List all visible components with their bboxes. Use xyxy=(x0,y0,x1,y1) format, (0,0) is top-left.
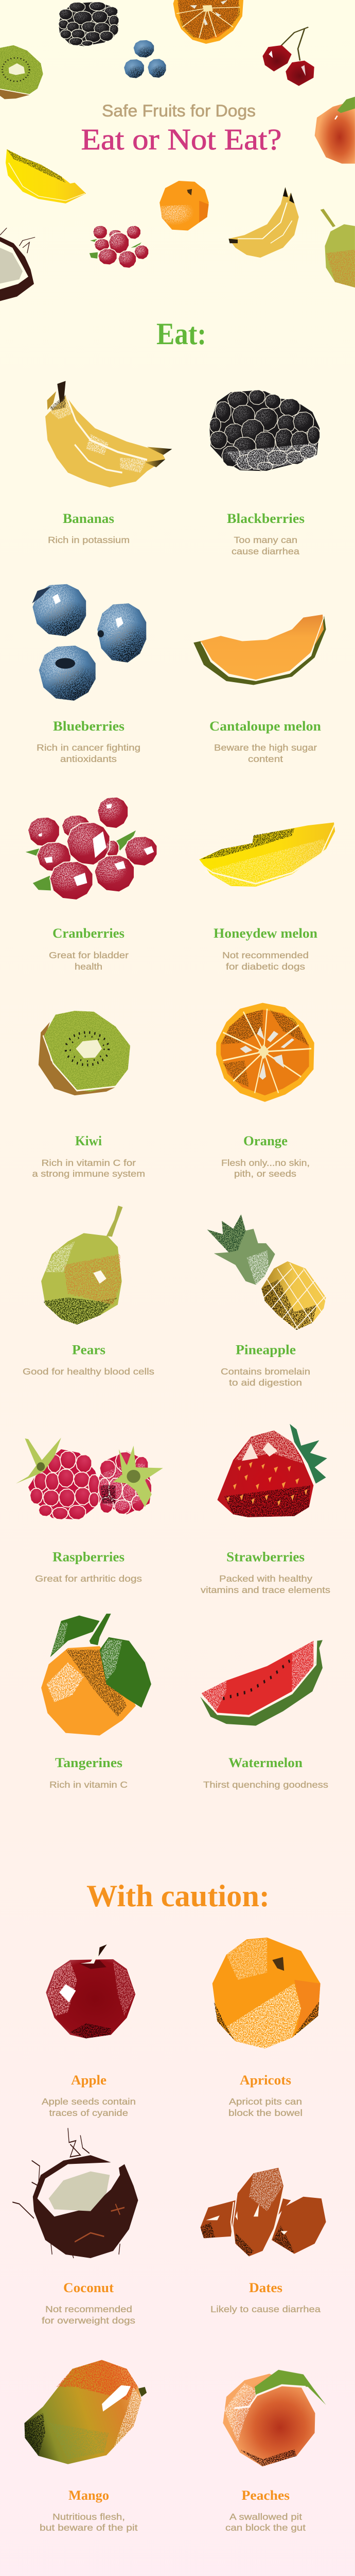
icon: pear header xyxy=(321,209,355,287)
description: Great for bladder xyxy=(49,950,129,960)
description: for overweight dogs xyxy=(42,2315,135,2326)
icon: pineapple xyxy=(207,1214,326,1330)
panel: watermelon xyxy=(200,1640,328,1790)
label: Dates xyxy=(249,2280,282,2295)
icon: banana xyxy=(45,381,172,487)
panel: pineapple xyxy=(207,1214,326,1388)
icon: cherries header xyxy=(262,27,314,86)
label: Blueberries xyxy=(53,719,125,734)
label: Watermelon xyxy=(228,1755,303,1770)
icon: honeydew slice xyxy=(199,822,335,887)
label: Honeydew melon xyxy=(214,926,318,941)
icon: apricot xyxy=(212,1938,321,2048)
description xyxy=(228,2096,303,2118)
panel: strawberries xyxy=(201,1424,330,1595)
panel: tangerines xyxy=(41,1614,151,1790)
description: Packed with healthy xyxy=(219,1573,312,1584)
description: Good for healthy blood cells xyxy=(23,1366,154,1377)
description xyxy=(225,2512,306,2533)
description: a strong immune system xyxy=(32,1168,145,1179)
icon: dates xyxy=(200,2168,326,2256)
icon: orange slice xyxy=(216,1003,314,1102)
description: antioxidants xyxy=(60,754,117,764)
heading: With caution: With caution: xyxy=(86,1879,270,1913)
label: Cranberries xyxy=(52,926,125,941)
description xyxy=(221,1158,310,1179)
panel: bananas xyxy=(45,381,172,545)
icon: cantaloupe slice xyxy=(193,615,326,685)
label: Apricots xyxy=(240,2073,291,2088)
description: Rich in potassium xyxy=(48,535,130,545)
icon: apple xyxy=(46,1944,135,2038)
description: Rich in cancer fighting xyxy=(37,742,140,753)
label: Apple xyxy=(71,2073,106,2088)
icon: tangerine xyxy=(41,1614,151,1736)
description: Apple seeds contain xyxy=(42,2096,136,2107)
description xyxy=(37,742,140,764)
heading: Eat: Eat: xyxy=(156,317,206,351)
panel: cantaloupe xyxy=(193,615,326,764)
icon: cranberries xyxy=(26,797,157,900)
description: Not recommended xyxy=(45,2304,132,2314)
icon: orange slice header xyxy=(173,0,243,44)
label: Coconut xyxy=(63,2280,114,2295)
panel: kiwi xyxy=(32,1011,145,1179)
header xyxy=(0,0,355,301)
description: Apricot pits can xyxy=(229,2096,302,2107)
description xyxy=(32,1158,145,1179)
panel: orange xyxy=(216,1003,314,1179)
description xyxy=(40,2512,138,2533)
label: Peaches xyxy=(242,2488,290,2503)
description: Too many can xyxy=(234,535,297,545)
label: Tangerines xyxy=(55,1755,122,1770)
icon: honeydew header xyxy=(6,149,86,204)
panel: apple xyxy=(42,1944,136,2118)
description: but beware of the pit xyxy=(40,2522,138,2533)
label: Blackberries xyxy=(227,511,305,526)
title: Eat or Not Eat? xyxy=(81,123,282,156)
label: Orange xyxy=(243,1133,288,1148)
icon: pear xyxy=(41,1206,122,1325)
description: Rich in vitamin C for xyxy=(41,1158,136,1168)
description: Beware the high sugar xyxy=(214,742,317,753)
description: to aid digestion xyxy=(229,1378,302,1388)
description: Nutritious flesh, xyxy=(52,2512,125,2522)
description: Contains bromelain xyxy=(221,1366,310,1377)
label: Strawberries xyxy=(226,1550,305,1564)
icon: raspberries xyxy=(16,1438,163,1520)
icon: kiwi xyxy=(39,1011,130,1095)
panel: blueberries xyxy=(32,584,146,764)
label: Mango xyxy=(68,2488,109,2503)
panel: dates xyxy=(200,2168,326,2314)
description: Thirst quenching goodness xyxy=(203,1780,328,1790)
label: Pineapple xyxy=(236,1343,296,1357)
icon: coconut header xyxy=(0,228,35,301)
description: for diabetic dogs xyxy=(226,961,305,972)
label: Kiwi xyxy=(75,1133,102,1148)
panel: raspberries xyxy=(16,1438,163,1584)
description: content xyxy=(248,754,283,764)
icon: watermelon slice xyxy=(200,1640,323,1726)
description: can block the gut xyxy=(225,2522,306,2533)
panel: cranberries xyxy=(26,797,157,972)
description xyxy=(49,950,129,972)
icon: mango xyxy=(25,2360,147,2464)
label: Raspberries xyxy=(52,1550,125,1564)
description: pith, or seeds xyxy=(234,1168,296,1179)
description: cause diarrhea xyxy=(232,546,299,556)
description xyxy=(221,1366,310,1388)
label: Cantaloupe melon xyxy=(209,719,322,734)
description xyxy=(42,2096,136,2118)
panel: coconut xyxy=(12,2128,138,2326)
panel: pears xyxy=(23,1206,154,1377)
panel: apricots xyxy=(212,1938,321,2118)
description xyxy=(201,1573,330,1595)
icon: blueberries header xyxy=(124,40,166,78)
description xyxy=(222,950,309,972)
description: health xyxy=(75,961,102,972)
icon: cranberries header xyxy=(90,226,149,268)
description: vitamins and trace elements xyxy=(201,1585,330,1595)
description xyxy=(42,2304,135,2326)
panel: peaches xyxy=(223,2370,326,2533)
panel: honeydew xyxy=(199,822,335,972)
description: Great for arthritic dogs xyxy=(35,1573,142,1584)
icon: apricot header xyxy=(159,181,209,231)
description: block the bowel xyxy=(228,2108,303,2118)
label: Bananas xyxy=(63,511,114,526)
icon: strawberry xyxy=(217,1424,327,1517)
panel: blackberries xyxy=(209,390,320,556)
icon: blackberry xyxy=(209,390,320,471)
panel: mango xyxy=(25,2360,147,2533)
icon: peach xyxy=(223,2370,326,2466)
icon: coconut xyxy=(12,2128,138,2258)
description: Rich in vitamin C xyxy=(49,1780,128,1790)
icon: blackberry header xyxy=(59,2,119,46)
description xyxy=(232,535,299,556)
icon: blueberries xyxy=(32,584,146,701)
description: Not recommended xyxy=(222,950,309,960)
icon: kiwi header xyxy=(0,45,43,99)
description: Likely to cause diarrhea xyxy=(210,2304,321,2314)
description xyxy=(214,742,317,764)
subtitle: Safe Fruits for Dogs xyxy=(102,101,256,120)
label: Pears xyxy=(72,1343,105,1357)
description: traces of cyanide xyxy=(49,2108,128,2118)
description: A swallowed pit xyxy=(229,2512,302,2522)
icon: banana header xyxy=(228,187,299,258)
icon: peach header xyxy=(315,97,355,164)
description: Flesh only...no skin, xyxy=(221,1158,310,1168)
